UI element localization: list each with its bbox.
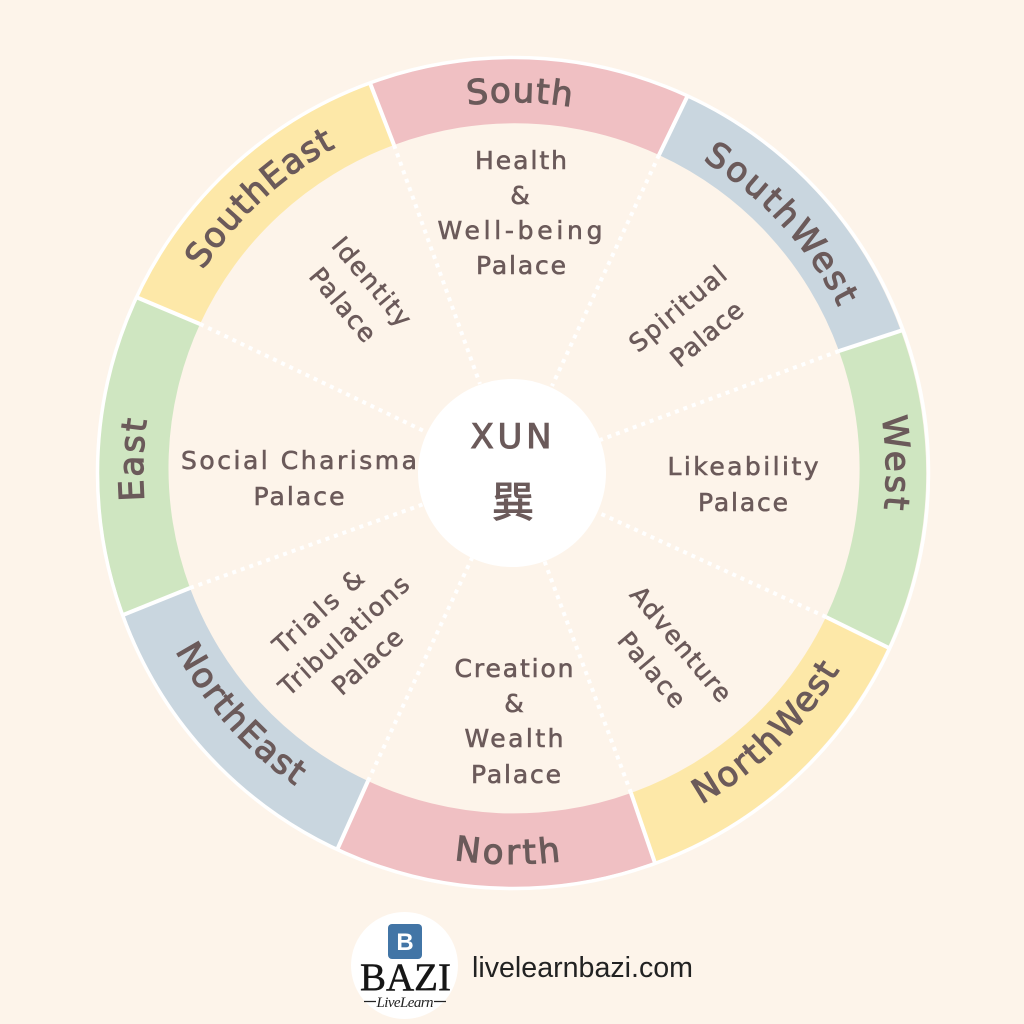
direction label: SouthEast: SouthEast — [186, 129, 336, 268]
palace: Spiritual: Spiritual — [623, 260, 732, 358]
direction label: West: West — [882, 414, 911, 510]
logo: Bazi LiveLearn: BAZI — [360, 956, 451, 999]
palace: Creation and Wealth: Palace — [471, 760, 561, 789]
center circle: Xun: 巽 — [492, 479, 534, 526]
palace: Adventure — [594, 580, 738, 733]
segment: NorthWest — [631, 617, 888, 862]
website url: livelearnbazi.com — [472, 952, 693, 984]
palace: Health and Well-being: Well-being — [438, 216, 602, 245]
palace: Social Charisma: Palace — [254, 482, 344, 511]
palace: Trials and Tribulations: Tribulations — [272, 570, 415, 702]
palace: Trials and Tribulations — [249, 544, 439, 728]
segment: SouthEast — [137, 84, 394, 324]
direction label: NorthWest: NorthWest — [690, 660, 840, 804]
center circle: Xun: XUN — [470, 417, 552, 457]
palace: Identity: Identity — [326, 231, 418, 333]
palace: Trials and Tribulations: Trials & — [266, 563, 370, 661]
palace: Likeability: Palace — [698, 488, 788, 517]
palace: Identity: Palace — [303, 262, 382, 348]
direction label: NorthEast: NorthEast — [176, 640, 306, 786]
palace: Creation and Wealth: Creation — [454, 654, 574, 683]
palace: Identity — [298, 231, 418, 356]
palace: Adventure: Adventure — [624, 580, 738, 708]
palace: Likeability: Likeability — [668, 452, 819, 481]
palace: Spiritual: Palace — [665, 295, 749, 373]
segment: NorthEast — [124, 588, 368, 849]
palace: Health and Well-being — [438, 146, 602, 280]
segment: South — [371, 59, 687, 155]
direction label: SouthWest: SouthWest — [704, 142, 858, 307]
palace: Creation and Wealth: Wealth — [464, 724, 564, 753]
logo: Bazi LiveLearn: LiveLearn — [376, 995, 434, 1011]
logo: Bazi LiveLearn — [351, 912, 458, 1019]
segment: West — [826, 331, 926, 647]
palace: Trials and Tribulations: Palace — [326, 622, 409, 701]
palace: Social Charisma — [181, 446, 417, 511]
segment: East — [99, 298, 200, 614]
palace: Adventure: Palace — [612, 626, 692, 714]
segment: North — [337, 781, 654, 887]
palace: Health and Well-being: Palace — [476, 251, 566, 280]
palace: Creation and Wealth — [454, 654, 574, 789]
direction label: South: South — [468, 78, 570, 107]
palace: Health and Well-being: Health — [475, 146, 567, 175]
palace: Social Charisma: Social Charisma — [181, 446, 417, 475]
palace: Spiritual — [623, 260, 757, 387]
palace: Creation and Wealth: & — [504, 689, 524, 718]
center circle: Xun — [418, 379, 606, 567]
palace: Likeability — [668, 452, 819, 517]
outer ring — [99, 59, 926, 887]
icon: blue B badge: B — [396, 929, 414, 956]
segment: SouthWest — [659, 97, 901, 351]
direction label: East: East — [118, 418, 148, 500]
palace: Health and Well-being: & — [510, 181, 530, 210]
direction label: North: North — [456, 835, 558, 864]
